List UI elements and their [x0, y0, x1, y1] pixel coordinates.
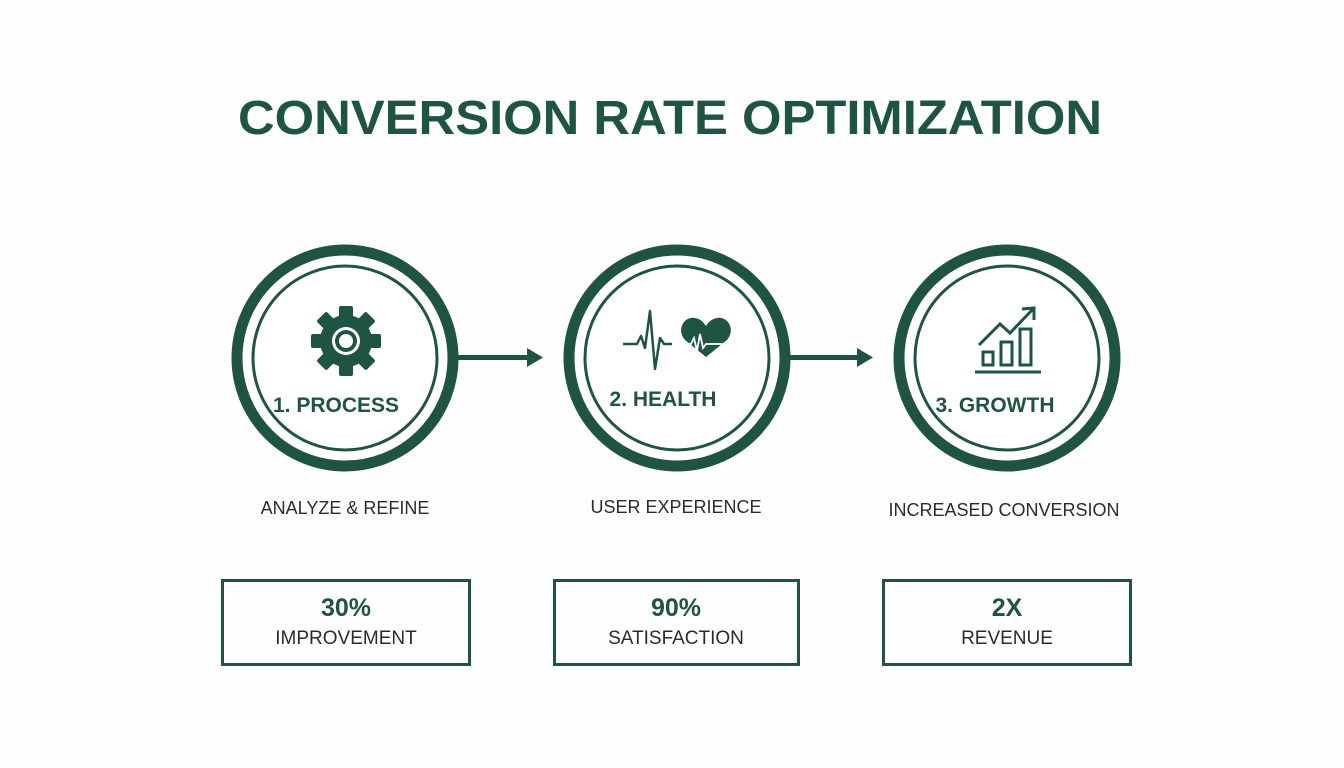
step 1: process — [237, 250, 453, 466]
stat box 3: 2X — [992, 594, 1023, 622]
stat box 2: 90% — [651, 594, 701, 622]
stat box 1: IMPROVEMENT — [275, 628, 417, 649]
stat box 3: REVENUE — [961, 628, 1053, 649]
description 1: ANALYZE & REFINE — [261, 498, 429, 518]
step label 2: 2. HEALTH — [610, 388, 716, 411]
step 2: health — [569, 250, 785, 466]
icon: heartbeat heart — [623, 311, 731, 369]
step label 1: 1. PROCESS — [273, 394, 399, 417]
icon: gear — [311, 306, 381, 376]
step label 3: 3. GROWTH — [936, 394, 1054, 417]
stat box 2: SATISFACTION — [608, 628, 744, 649]
icon: growth chart — [975, 308, 1041, 372]
stat box 1 — [222, 580, 470, 664]
title: CONVERSION RATE OPTIMIZATION — [238, 92, 1102, 145]
arrow 1 — [458, 348, 543, 367]
arrow 2 — [790, 348, 873, 367]
step 3: growth — [899, 250, 1115, 466]
stat box 3 — [884, 580, 1130, 664]
description 2: USER EXPERIENCE — [590, 497, 762, 517]
description 3: INCREASED CONVERSION — [888, 500, 1120, 520]
stat box 1: 30% — [321, 594, 371, 622]
stat box 2 — [554, 580, 798, 664]
